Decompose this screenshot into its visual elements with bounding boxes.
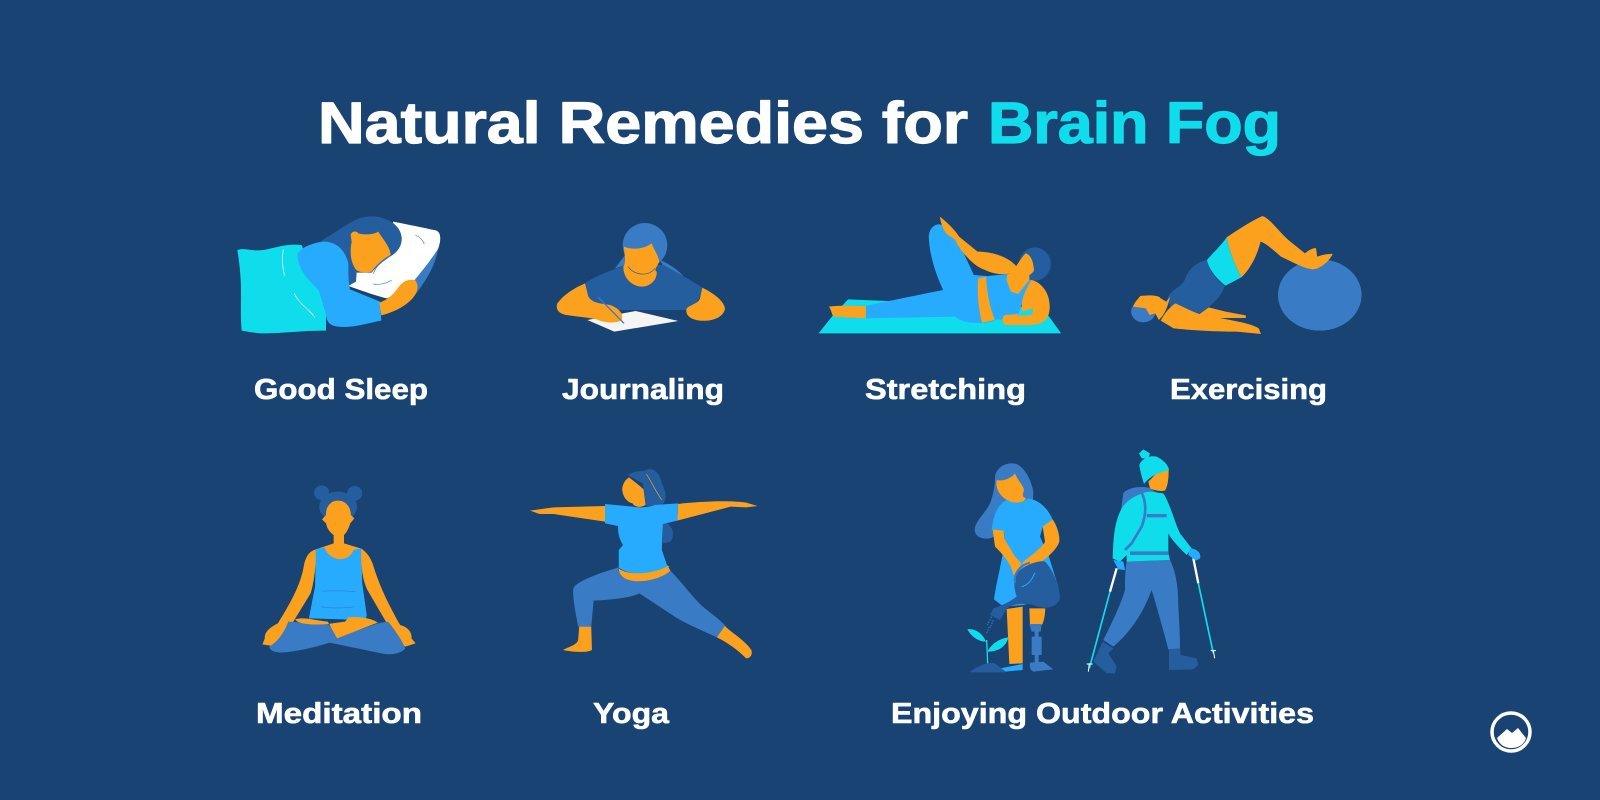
title xyxy=(318,91,1281,156)
title: Natural Remedies for xyxy=(318,91,968,156)
label: journaling: Journaling xyxy=(562,374,724,406)
label: meditation: Meditation xyxy=(256,698,422,730)
icon: yoga xyxy=(530,469,758,658)
label: stretching: Stretching xyxy=(865,374,1026,406)
icon: gardener watering plant xyxy=(967,463,1060,672)
icon: exercising xyxy=(1131,216,1362,334)
label: enjoying outdoor activities: Enjoying Outdoor Activities xyxy=(891,698,1314,730)
icon: good sleep xyxy=(237,216,440,333)
icon: journaling xyxy=(557,223,725,332)
icon: logo xyxy=(1492,713,1530,751)
label: good sleep: Good Sleep xyxy=(254,374,428,406)
label: yoga: Yoga xyxy=(593,698,670,730)
icon: hiker with poles xyxy=(1087,449,1216,673)
icon: stretching xyxy=(818,217,1061,333)
label: exercising: Exercising xyxy=(1170,374,1327,406)
title: Brain Fog xyxy=(988,91,1281,156)
icon: meditation xyxy=(262,485,416,654)
